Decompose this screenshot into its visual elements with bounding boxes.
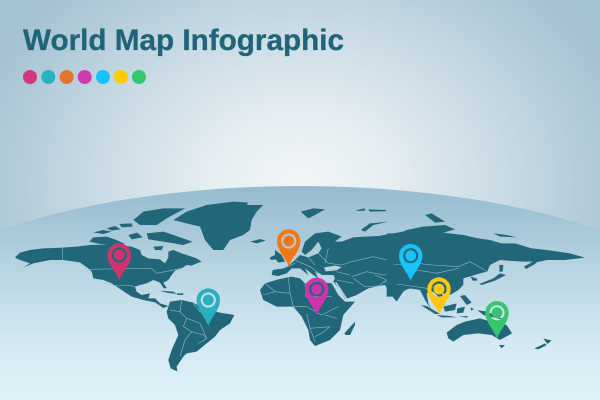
pin: blue, Asia — [399, 244, 422, 281]
pin: pink, North America — [108, 243, 131, 280]
map: East Asia and Oceania — [387, 213, 585, 349]
pin: teal, South America — [197, 288, 220, 326]
globe surface — [0, 186, 600, 400]
pin: orange, Europe — [277, 229, 300, 266]
map: inland seas — [324, 266, 348, 299]
color dots row — [23, 70, 146, 84]
title: World Map Infographic — [23, 24, 344, 57]
pin: yellow, Southeast Asia — [427, 277, 451, 314]
pin: magenta, Africa — [305, 278, 328, 315]
map: Europe, Africa and West Asia — [250, 208, 420, 346]
map: Greenland and South America — [167, 202, 263, 371]
world map — [15, 202, 585, 371]
pin: green, Australia — [485, 301, 509, 338]
map: North America — [15, 208, 202, 308]
